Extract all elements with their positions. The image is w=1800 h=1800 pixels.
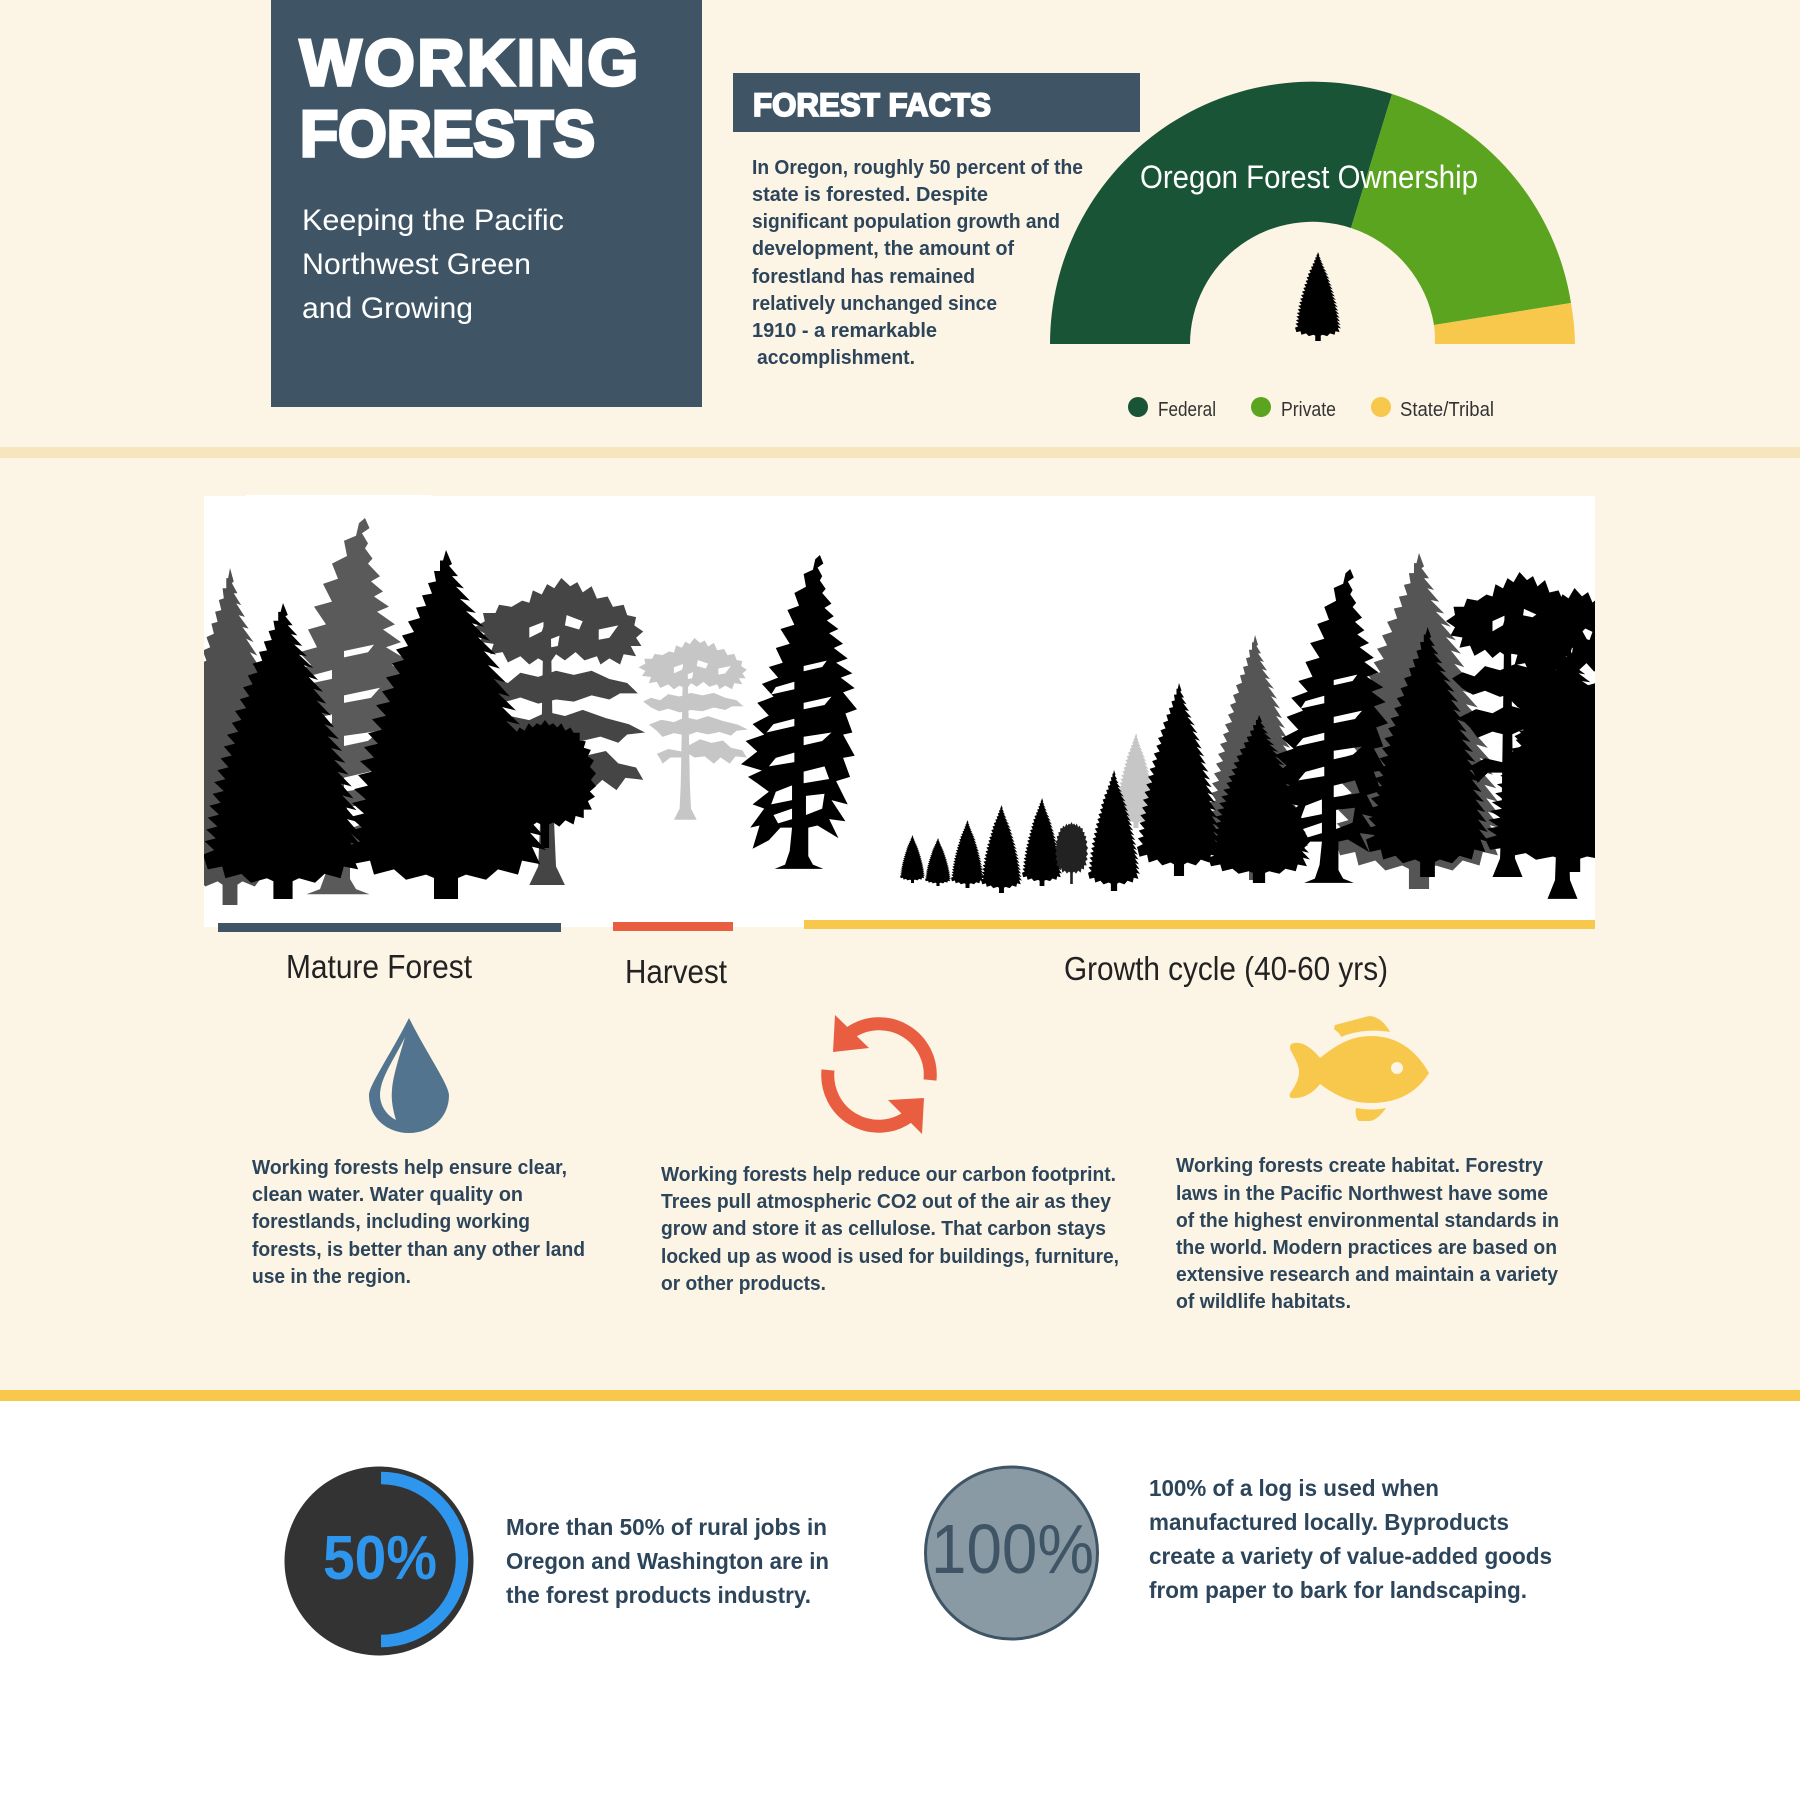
forest facts paragraph (752, 156, 1083, 369)
stat: 100 percent circle: 100% (931, 1510, 1094, 1588)
bar: harvest (613, 922, 733, 931)
text: carbon footprint: or other products. (661, 1272, 826, 1295)
text: habitat: of the highest environmental standards in (1176, 1209, 1559, 1232)
text: log use: create a variety of value-added goods (1149, 1543, 1552, 1569)
trees: mature forest (168, 518, 645, 905)
trees: growth cycle (900, 553, 1655, 899)
stat: 50 percent circle: 50% (323, 1524, 437, 1593)
segment: state and tribal (1434, 303, 1575, 344)
icon: small tree (1295, 252, 1341, 341)
text: rural jobs: More than 50% of rural jobs in (506, 1514, 827, 1540)
text: carbon footprint (661, 1163, 1119, 1295)
legend: State/Tribal (1400, 399, 1494, 421)
text: carbon footprint: Working forests help reduce our carbon footprint. (661, 1163, 1116, 1186)
text: habitat: extensive research and maintain a variety (1176, 1263, 1559, 1286)
text: carbon footprint: Trees pull atmospheric CO2 out of the air as they (661, 1190, 1112, 1213)
subtitle: Northwest Green (302, 248, 531, 281)
stat: 100 percent circle (926, 1467, 1098, 1639)
text: habitat: of wildlife habitats. (1176, 1290, 1351, 1313)
stat: 50 percent circle (284, 1466, 474, 1656)
text: log use (1149, 1475, 1552, 1603)
text: log use: manufactured locally. Byproducts (1149, 1509, 1509, 1535)
forest facts paragraph: relatively unchanged since (752, 292, 997, 315)
text: clean water: forestlands, including working (252, 1210, 530, 1233)
text: rural jobs: Oregon and Washington are in (506, 1548, 829, 1574)
bar: mature forest (218, 923, 561, 932)
text: carbon footprint: locked up as wood is used for buildings, furniture, (661, 1245, 1119, 1268)
text: carbon footprint: grow and store it as cellulose. That carbon stays (661, 1217, 1106, 1240)
bar: growth cycle (804, 920, 1595, 929)
icon: water drop (369, 1018, 449, 1133)
icon: fish (1290, 1016, 1429, 1121)
text: clean water: Working forests help ensure clear, (252, 1156, 567, 1179)
panel: forest silhouette scene (168, 496, 1655, 927)
forest facts paragraph: In Oregon, roughly 50 percent of the (752, 156, 1083, 179)
forest facts paragraph: significant population growth and (752, 210, 1060, 233)
text: rural jobs: the forest products industry. (506, 1582, 811, 1608)
forest facts heading: FOREST FACTS (753, 87, 991, 123)
white footer background (0, 1401, 1800, 1800)
forest facts paragraph: 1910 - a remarkable (752, 319, 937, 342)
label: harvest: Harvest (625, 953, 727, 990)
text: clean water (252, 1156, 585, 1288)
text: clean water: forests, is better than any other land (252, 1238, 585, 1261)
forest facts paragraph: forestland has remained (752, 265, 975, 288)
title (300, 26, 638, 170)
label: growth cycle: Growth cycle (40-60 yrs) (1064, 950, 1388, 987)
forest facts paragraph: state is forested. Despite (752, 183, 988, 206)
text: log use: 100% of a log is used when (1149, 1475, 1439, 1501)
label: mature forest: Mature Forest (286, 948, 472, 985)
segment: federal (1050, 82, 1392, 344)
text: habitat (1176, 1154, 1559, 1313)
legend: Private (1281, 399, 1336, 421)
text: rural jobs (506, 1514, 829, 1608)
subtitle: and Growing (302, 292, 473, 325)
forest facts heading (733, 73, 1140, 132)
forest facts paragraph: development, the amount of (752, 237, 1014, 260)
text: clean water: clean water. Water quality on (252, 1183, 523, 1206)
icon: recycle arrows (828, 1015, 930, 1134)
chart title: Oregon Forest Ownership (1140, 159, 1478, 195)
text: clean water: use in the region. (252, 1265, 411, 1288)
title: WORKING (300, 26, 638, 99)
legend (1128, 397, 1494, 421)
subtitle (302, 204, 564, 325)
text: habitat: Working forests create habitat. Forestry (1176, 1154, 1544, 1177)
forest facts paragraph: accomplishment. (757, 346, 915, 369)
chart: Oregon forest ownership semicircle (1050, 82, 1575, 344)
trees: harvest (639, 555, 857, 869)
title panel (271, 0, 702, 407)
text: habitat: the world. Modern practices are based on (1176, 1236, 1557, 1259)
subtitle: Keeping the Pacific (302, 204, 564, 237)
segment: private (1351, 94, 1571, 325)
legend: Federal (1158, 399, 1216, 421)
text: habitat: laws in the Pacific Northwest have some (1176, 1182, 1548, 1205)
text: log use: from paper to bark for landscaping. (1149, 1577, 1527, 1603)
title: FORESTS (300, 97, 595, 170)
cream background (0, 0, 1800, 1391)
